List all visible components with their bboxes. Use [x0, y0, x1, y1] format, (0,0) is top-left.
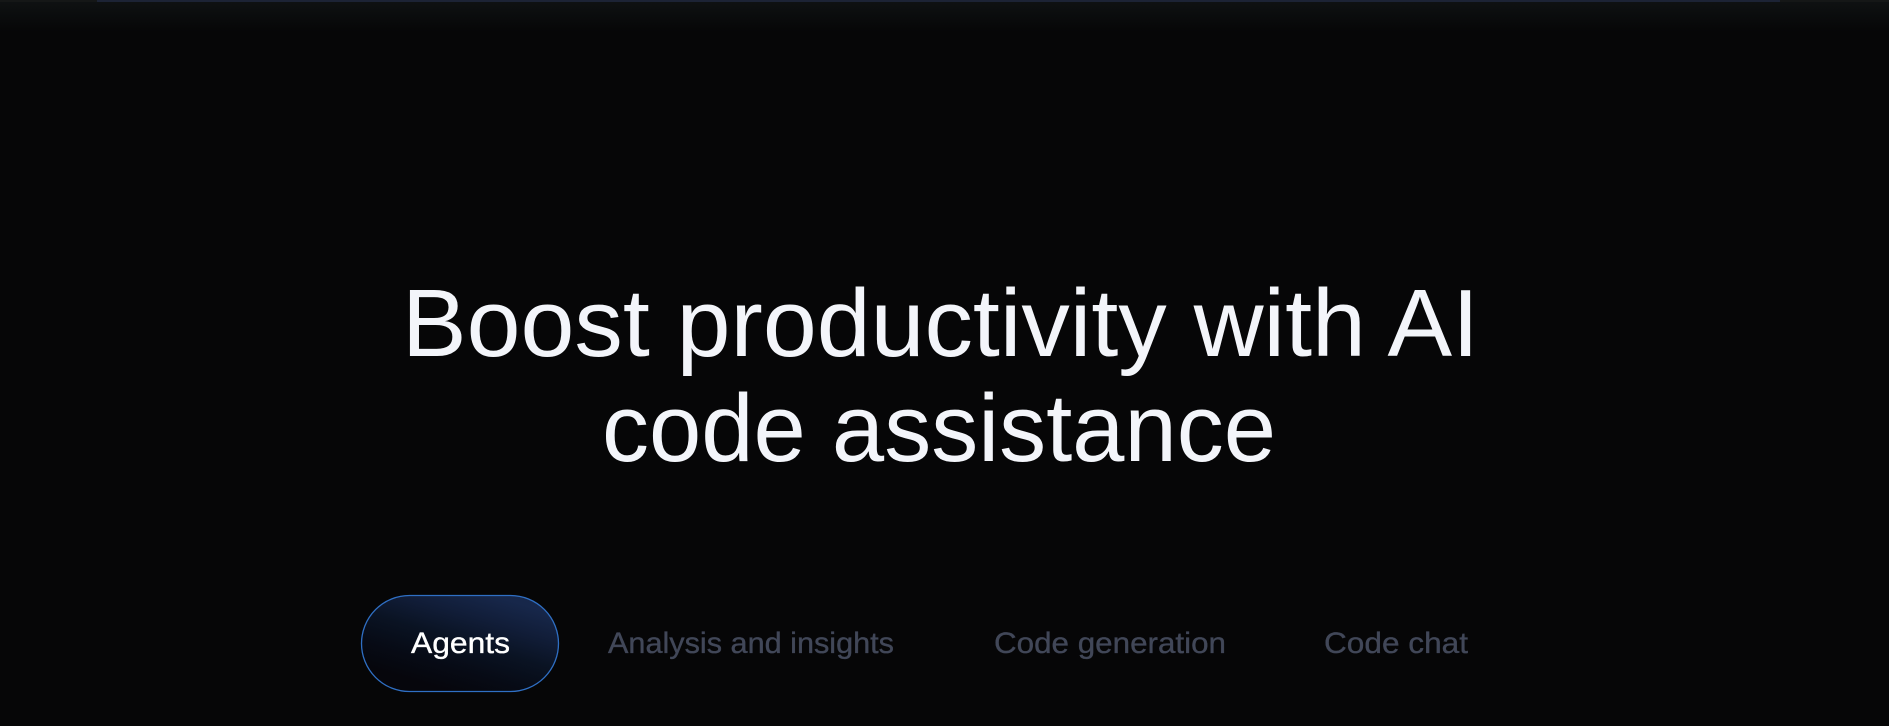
active tab: Agents — [362, 596, 558, 692]
title: code assistance — [602, 375, 1276, 482]
tab: Code generation: Code generation — [994, 627, 1226, 660]
title: Boost productivity with AI — [402, 270, 1479, 377]
tab: Code chat: Code chat — [1324, 627, 1469, 660]
tab: Analysis and insights: Analysis and insights — [608, 627, 894, 660]
active tab: Agents: Agents — [411, 627, 510, 660]
tab bar — [362, 596, 1469, 692]
title — [402, 270, 1479, 482]
